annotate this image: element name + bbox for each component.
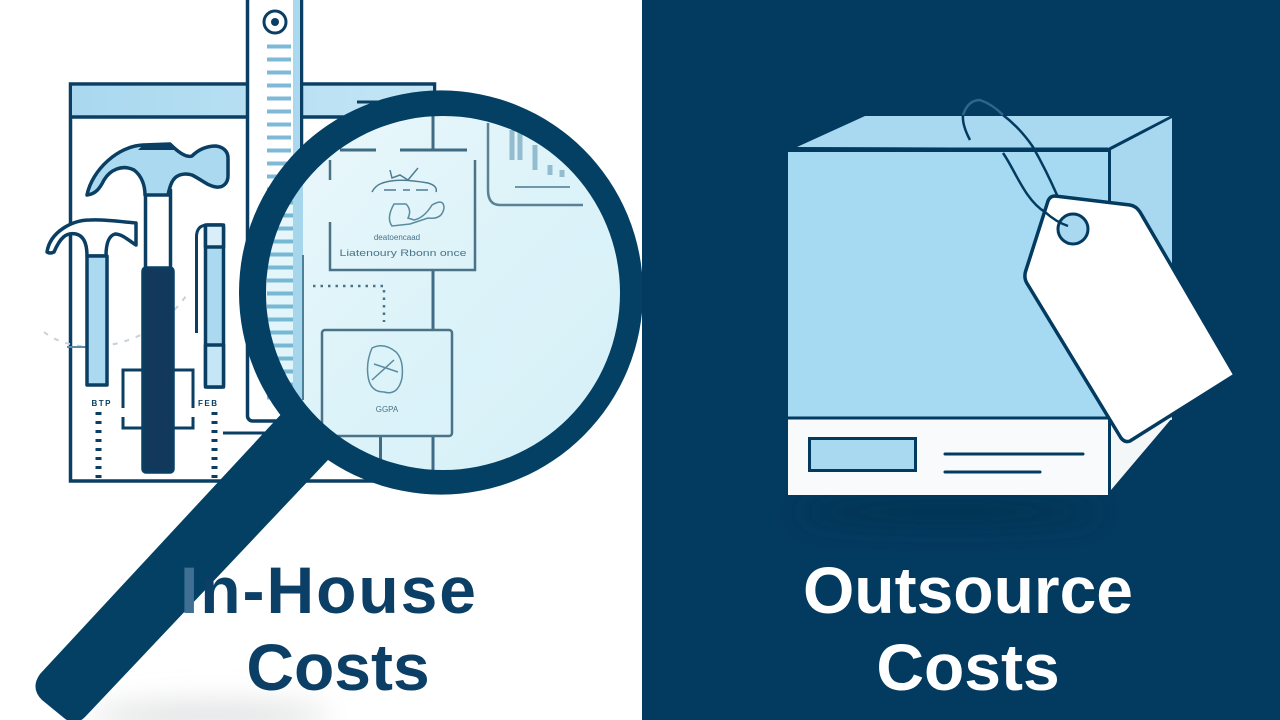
icon: bracket and measure marks: BTP: [92, 399, 112, 408]
icon: bracket and measure marks: FEB: [198, 399, 218, 408]
callout: lens box one: Liatenoury Rbonn once: [340, 248, 466, 259]
magnifier lens contents: [247, 110, 623, 473]
callout: lens box one: deatoencaad: [374, 233, 420, 242]
icon: small hammer: [47, 220, 136, 385]
heading: outsource costs: Outsource: [803, 553, 1133, 627]
icon: pen: [196, 225, 224, 387]
icon: price tag string: [963, 100, 1057, 195]
callout: lens chart fragment: [488, 123, 583, 205]
icon: ruler: [248, 0, 302, 421]
box label: [810, 438, 916, 470]
panel: in-house: [0, 0, 643, 720]
icon: price tag: [1003, 153, 1235, 442]
panel: outsource: [642, 0, 1280, 720]
icon: large hammer: [87, 144, 228, 472]
heading: in-house costs: Costs: [246, 630, 430, 704]
icon: window frame: [70, 84, 435, 481]
icon: bracket and measure marks: [92, 370, 280, 478]
heading: outsource costs: Costs: [876, 630, 1060, 704]
icon: magnifier ring: [239, 90, 643, 495]
icon: faint dotted arc: [44, 296, 186, 347]
callout: lens box two: GGPA: [376, 405, 399, 414]
box text lines: [945, 454, 1083, 472]
icon: package box: [788, 116, 1172, 495]
icon: magnifier handle: [35, 410, 345, 720]
heading: in-house costs: [180, 553, 476, 704]
callout: lens box two: [322, 330, 452, 436]
heading: outsource costs: [803, 553, 1133, 704]
heading: in-house costs: In-House: [180, 553, 476, 627]
dotted connector: [313, 286, 384, 322]
callout: lens box one: [330, 160, 475, 270]
